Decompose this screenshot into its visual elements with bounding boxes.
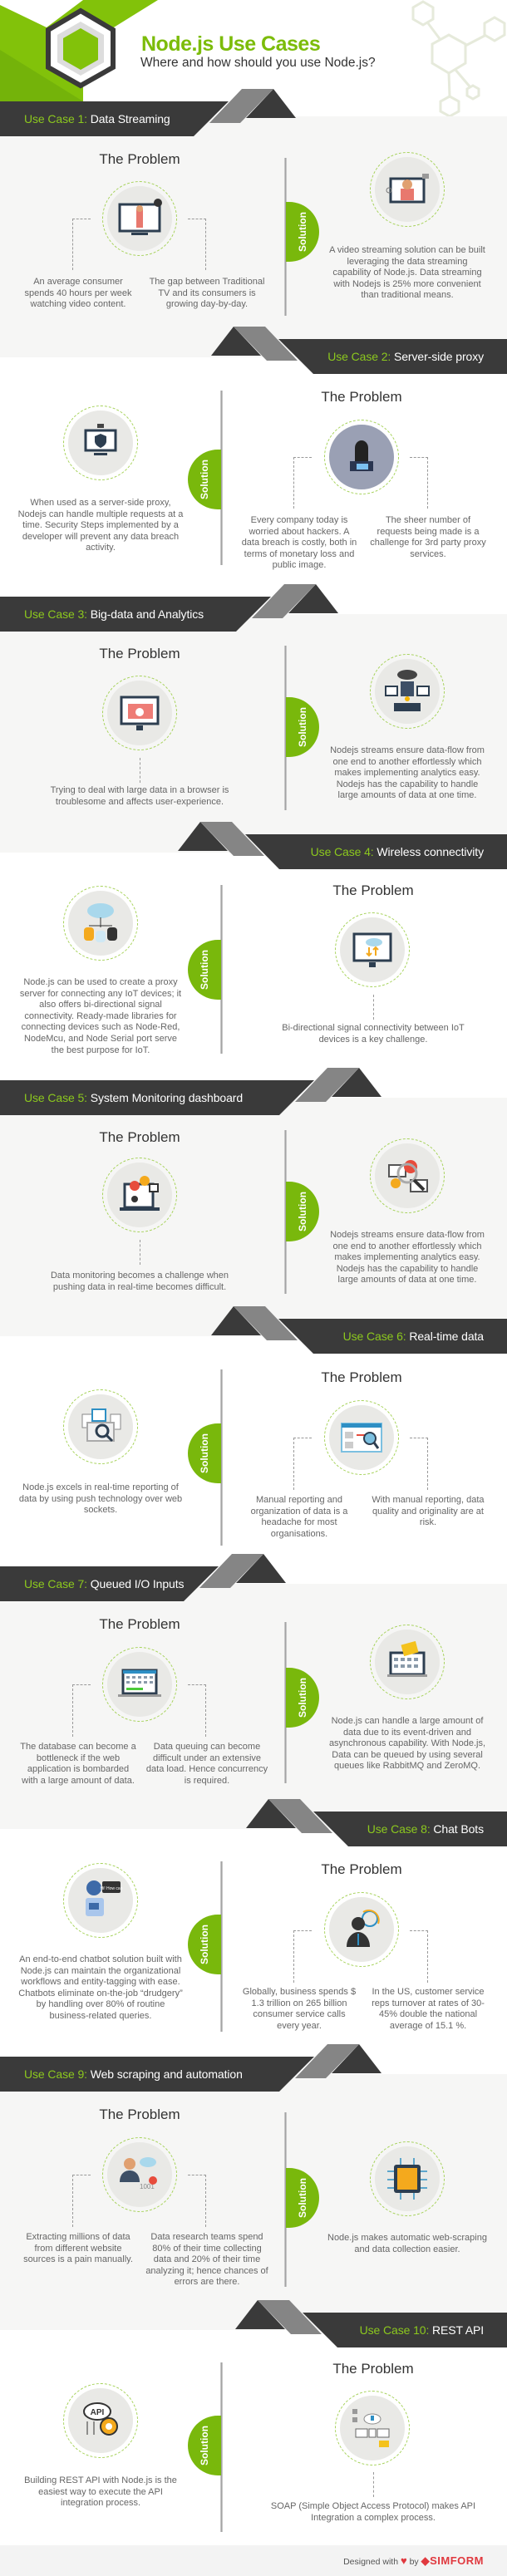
solution icon 1 <box>370 152 445 227</box>
problem brackets 1 <box>72 219 206 270</box>
banner: use case 1 <box>0 89 296 136</box>
banner: use case 6 <box>211 1306 507 1354</box>
divider 7 <box>284 1622 287 1783</box>
solution icon 8: Hi! How can <box>101 1886 123 1891</box>
banner: use case 9 <box>0 2044 381 2092</box>
divider 1 <box>284 158 287 316</box>
solution tab 8: Solution <box>199 1925 210 1964</box>
banner: use case 7 <box>0 1554 286 1601</box>
solution tab 5 <box>286 1182 319 1241</box>
solution tab 7: Solution <box>297 1678 308 1718</box>
problem text 1b: The gap between Traditional TV and its consumers is growing day-by-day. <box>150 277 264 309</box>
problem icon 2 <box>324 420 399 494</box>
problem icon 9 <box>102 2137 177 2212</box>
divider 9 <box>284 2112 287 2287</box>
solution icon 6 <box>63 1389 138 1464</box>
banner: use case 4: Use Case 4: Wireless connectivity <box>311 845 484 858</box>
problem heading 2: The Problem <box>321 389 402 405</box>
banner: use case 8: Use Case 8: Chat Bots <box>367 1822 484 1836</box>
solution text 7: Node.js can handle a large amount of data due to its event-driven and asynchronous capability. With Node.js, Data can be queued by using several queues like RabbitMQ and ZeroMQ. <box>329 1716 485 1771</box>
solution tab 10: Solution <box>199 2426 210 2465</box>
solution text 4: Node.js can be used to create a proxy server for connecting any IoT devices; it also offers bi-directional signal connectivity. Ready-made libraries for connecting devices such as Node-Red, NodeMcu, and Node Serial port serve the best purpose for IoT. <box>20 977 181 1055</box>
solution tab 9 <box>286 2168 319 2228</box>
solution icon 2 <box>63 406 138 480</box>
solution tab 1 <box>286 202 319 262</box>
divider 8 <box>220 1861 223 2032</box>
solution tab 4 <box>188 940 221 1000</box>
banner: use case 2 <box>211 327 507 374</box>
solution icon 7 <box>370 1625 445 1699</box>
problem text 9a: Extracting millions of data from different website sources is a pain manually. <box>23 2232 133 2264</box>
problem icon 6 <box>324 1400 399 1475</box>
subtitle: Where and how should you use Node.js? <box>140 56 376 70</box>
solution tab 2: Solution <box>199 460 210 499</box>
solution icon 5 <box>370 1138 445 1213</box>
problem heading 1: The Problem <box>99 151 180 167</box>
problem icon 9: 1001 <box>140 2183 155 2190</box>
solution text 5: Nodejs streams ensure data-flow from one end to another effortlessly which makes implementing analytics easy. Nodejs has the capability to handle large amounts of data at one time. <box>330 1230 485 1285</box>
solution tab 9: Solution <box>297 2178 308 2218</box>
solution icon 4 <box>63 886 138 961</box>
problem text 6a: Manual reporting and organization of data is a headache for most organisations. <box>251 1495 347 1539</box>
problem icon 8 <box>324 1892 399 1967</box>
problem heading 9: The Problem <box>99 2107 180 2122</box>
divider 3 <box>284 646 287 810</box>
solution tab 5: Solution <box>297 1192 308 1231</box>
solution icon 9 <box>370 2141 445 2216</box>
solution text 3: Nodejs streams ensure data-flow from one end to another effortlessly which makes implementing analytics easy. Nodejs has the capability to handle large amounts of data at one time. <box>330 745 485 800</box>
solution tab 1: Solution <box>297 212 308 252</box>
solution tab 10 <box>188 2416 221 2475</box>
problem text 1a: An average consumer spends 40 hours per week watching video content. <box>24 277 132 309</box>
problem text 3: Trying to deal with large data in a browser is troublesome and affects user-experience. <box>51 785 229 807</box>
problem text 8a: Globally, business spends $ 1.3 trillion on 265 billion consumer service calls every year. <box>243 1987 356 2031</box>
solution icon 3 <box>370 654 445 729</box>
problem text 2b: The sheer number of requests being made is a challenge for 3rd party proxy services. <box>370 515 486 559</box>
problem icon 1 <box>102 181 177 256</box>
solution text 10: Building REST API with Node.js is the easiest way to execute the API integration process. <box>24 2475 177 2508</box>
solution tab 4: Solution <box>199 950 210 990</box>
solution icon 10 <box>63 2383 138 2458</box>
problem icon 7 <box>102 1647 177 1722</box>
solution text 1: A video streaming solution can be built leveraging the data streaming capability of Node.js. Data streaming with Nodejs is 25% more convenient than traditional means. <box>329 245 485 300</box>
problem text 7b: Data queuing can become difficult under an extensive data load. Hence concurrency is required. <box>146 1742 268 1786</box>
problem text 5: Data monitoring becomes a challenge when pushing data in real-time becomes difficult. <box>51 1271 229 1292</box>
problem brackets 8 <box>293 1930 428 1983</box>
title: Node.js Use Cases <box>141 32 320 56</box>
problem heading 6: The Problem <box>321 1369 402 1385</box>
problem text 9b: Data research teams spend 80% of their time collecting data and 20% of their time analyzing it; hence chances of errors are there. <box>145 2232 268 2287</box>
problem heading 3: The Problem <box>99 646 180 661</box>
banner: use case 7: Use Case 7: Queued I/O Inputs <box>24 1577 184 1590</box>
divider 10 <box>220 2362 223 2532</box>
banner: use case 3: Use Case 3: Big-data and Analytics <box>24 607 204 621</box>
problem heading 4: The Problem <box>332 882 414 898</box>
banner: use case 3 <box>0 584 338 632</box>
solution tab 8 <box>188 1915 221 1974</box>
problem icon 3 <box>102 676 177 750</box>
solution tab 2 <box>188 450 221 509</box>
problem text 4: Bi-directional signal connectivity between IoT devices is a key challenge. <box>282 1023 465 1045</box>
divider 2 <box>220 391 223 565</box>
solution tab 6 <box>188 1423 221 1483</box>
banner: use case 5 <box>0 1068 381 1115</box>
banner: use case 10: Use Case 10: REST API <box>360 2323 484 2337</box>
header graphic: green shapes and hexagon logo <box>0 0 158 101</box>
problem text 7a: The database can become a bottleneck if the web application is bombarded with a large amount of data. <box>20 1742 136 1786</box>
solution tab 6: Solution <box>199 1433 210 1473</box>
problem icon 10 <box>335 2391 410 2465</box>
divider 4 <box>220 885 223 1054</box>
problem brackets 9 <box>72 2175 206 2227</box>
problem icon 5 <box>102 1158 177 1232</box>
banner: use case 10 <box>235 2300 507 2347</box>
banner: use case 8 <box>246 1799 507 1846</box>
solution icon 8 <box>63 1863 138 1938</box>
problem connector 10 <box>373 2472 374 2497</box>
problem connector 4 <box>373 995 374 1020</box>
molecule decoration <box>412 0 505 116</box>
solution text 6: Node.js excels in real-time reporting of data by using push technology over web sockets. <box>19 1482 182 1515</box>
banner: use case 9: Use Case 9: Web scraping and automation <box>24 2067 243 2081</box>
banner: use case 5: Use Case 5: System Monitoring dashboard <box>24 1091 243 1104</box>
footer credit: Designed with ♥ by ◆SIMFORM <box>343 2554 484 2567</box>
problem brackets 6 <box>293 1438 428 1490</box>
problem heading 10: The Problem <box>332 2361 414 2377</box>
solution text 8: An end-to-end chatbot solution built with Node.js can maintain the organizational workflows and entity-tagging with ease. Chatbots eliminate on-the-job “drudgery” by handling over 80% of routine business-related queries. <box>18 1954 183 2021</box>
problem heading 5: The Problem <box>99 1129 180 1145</box>
problem text 2a: Every company today is worried about hackers. A data breach is costly, both in terms of monetary loss and public image. <box>242 515 357 570</box>
problem text 10: SOAP (Simple Object Access Protocol) makes API Integration a complex process. <box>271 2501 475 2523</box>
banner: use case 1: Use Case 1: Data Streaming <box>24 112 170 125</box>
problem text 8b: In the US, customer service reps turnover at rates of 30-45% double the national average of 15.1 %. <box>372 1987 485 2031</box>
problem heading 8: The Problem <box>321 1861 402 1877</box>
solution tab 3: Solution <box>297 707 308 747</box>
solution tab 7 <box>286 1668 319 1728</box>
banner: use case 2: Use Case 2: Server-side proxy <box>327 350 484 363</box>
solution tab 3 <box>286 697 319 757</box>
banner: use case 4 <box>178 822 507 869</box>
divider 6 <box>220 1369 223 1546</box>
problem icon 4 <box>335 912 410 987</box>
divider 5 <box>284 1130 287 1294</box>
problem brackets 7 <box>72 1684 206 1737</box>
solution icon 10: API <box>91 2408 105 2417</box>
problem brackets 2 <box>293 457 428 509</box>
problem text 6b: With manual reporting, data quality and originality are at risk. <box>372 1495 485 1527</box>
solution text 9: Node.js makes automatic web-scraping and data collection easier. <box>327 2233 487 2254</box>
solution text 2: When used as a server-side proxy, Nodejs can handle multiple requests at a time. Security Steps implemented by a developer will prevent any data breach activity. <box>18 498 183 553</box>
problem heading 7: The Problem <box>99 1616 180 1632</box>
banner: use case 6: Use Case 6: Real-time data <box>343 1330 484 1343</box>
